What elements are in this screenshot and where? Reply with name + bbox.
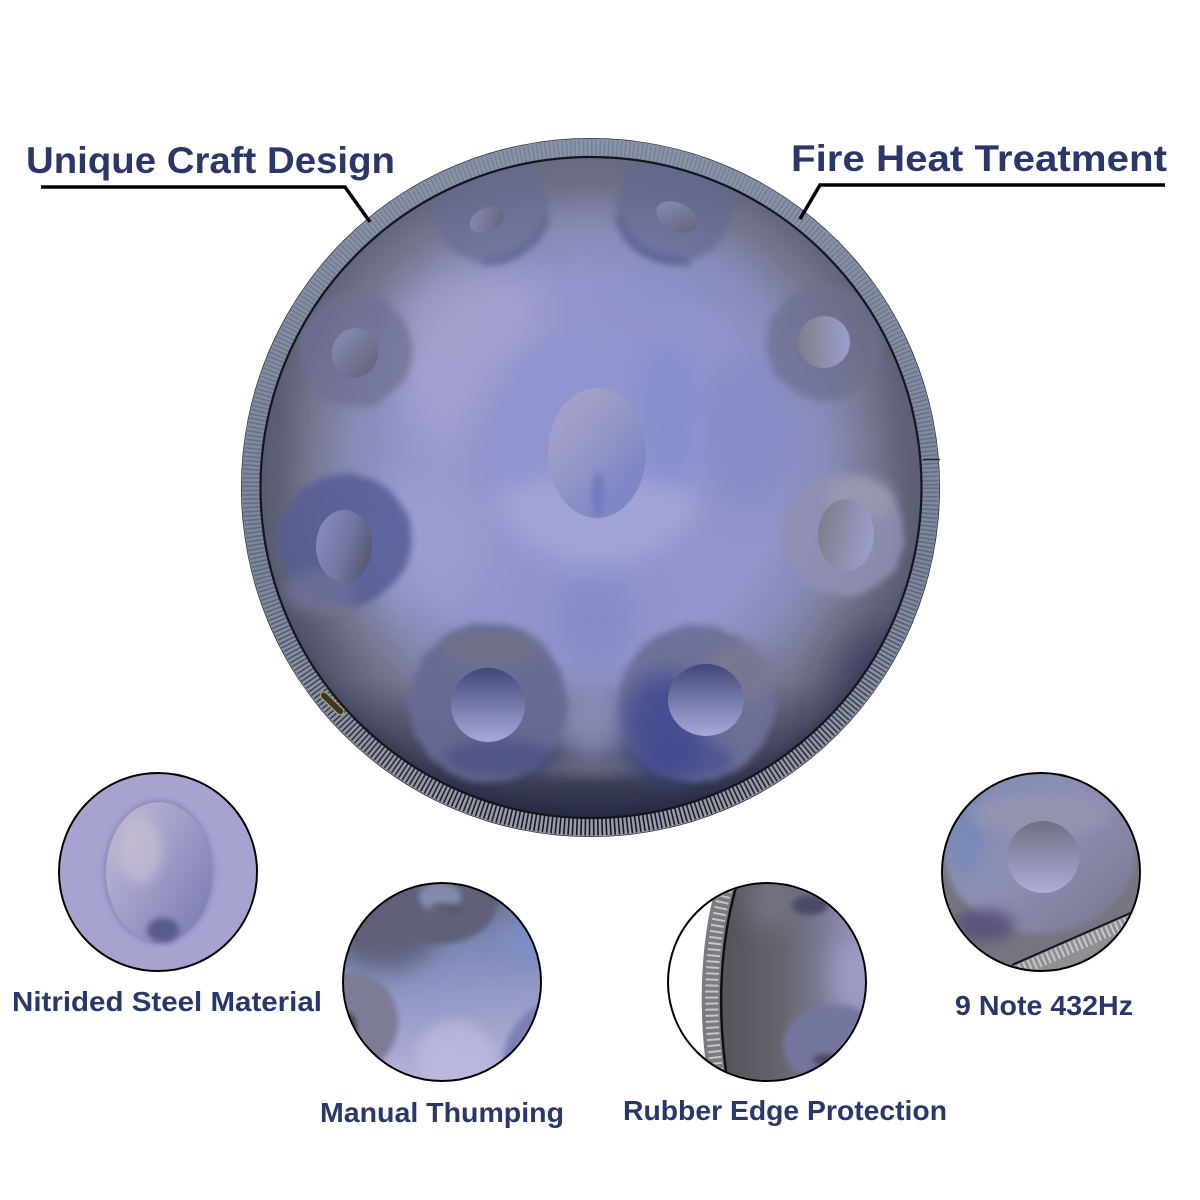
detail circle: surface close-up: [342, 882, 542, 1082]
detail circle: central note close-up: [59, 773, 257, 971]
note: lower left: [279, 474, 411, 614]
note: upper right: [767, 285, 883, 401]
main handpan instrument: [241, 138, 940, 837]
label: 9 Note 432Hz: [955, 990, 1133, 1021]
rubber edge rim: [241, 138, 940, 837]
note: lower right: [782, 474, 904, 596]
callout: Unique Craft Design: [26, 140, 395, 222]
note: upper left: [298, 293, 412, 407]
note: bottom right: [619, 625, 775, 781]
callout: Fire Heat Treatment: Fire Heat Treatment: [791, 138, 1167, 179]
detail: rubber edge protection: [623, 870, 947, 1126]
note: bottom left: [409, 624, 567, 782]
handpan infographic canvas: [14, 138, 1167, 1128]
callout: Unique Craft Design: Unique Craft Design: [26, 140, 395, 181]
inner rim line: [260, 157, 922, 818]
detail: 9 note 432Hz: [942, 765, 1150, 1021]
label: Rubber Edge Protection: [623, 1095, 947, 1126]
note: top left: [432, 147, 548, 263]
surface colour patches: [248, 150, 939, 800]
label: Nitrided Steel Material: [12, 986, 322, 1017]
central ding note: [504, 350, 694, 568]
detail circle: note close-up: [941, 772, 1141, 972]
note: top right: [617, 147, 733, 263]
detail: manual thumping: [322, 882, 562, 1128]
label: Manual Thumping: [320, 1097, 564, 1128]
detail circle: rim close-up: [667, 882, 867, 1082]
detail: nitrided steel material: [12, 773, 322, 1017]
dome surface: [248, 147, 939, 830]
callout: Fire Heat Treatment: [791, 138, 1167, 219]
brand badge: [319, 690, 345, 716]
